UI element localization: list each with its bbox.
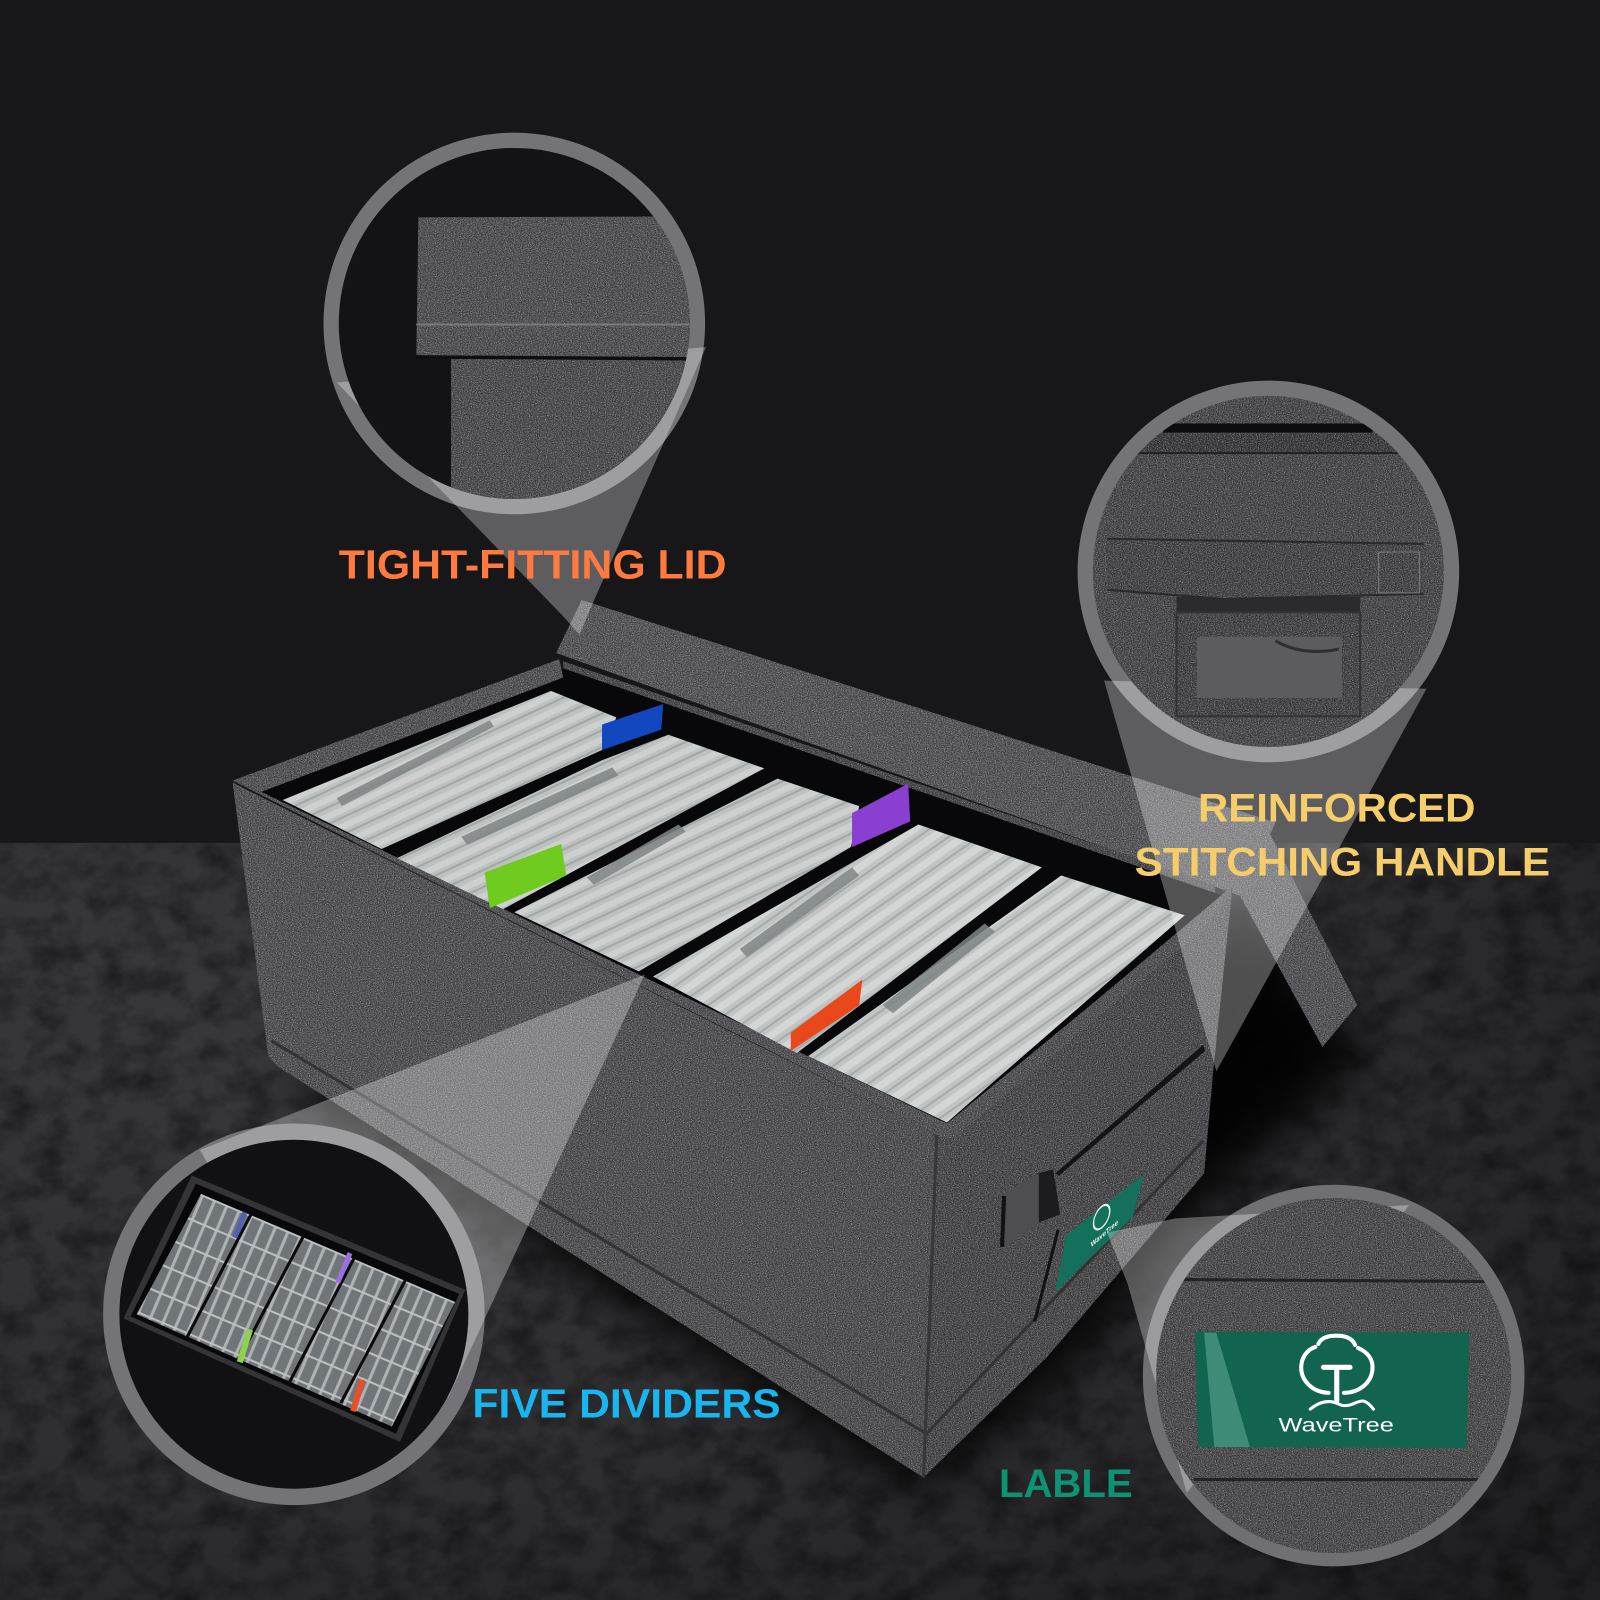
pointer cone xyxy=(1107,1205,1409,1493)
blue divider tab xyxy=(602,704,663,750)
side label logo xyxy=(1089,1194,1118,1249)
top view tabs xyxy=(235,1212,245,1238)
lid detail fabric xyxy=(416,216,690,499)
label pocket xyxy=(1178,613,1360,616)
circle ring xyxy=(1078,381,1459,762)
box shadow on floor xyxy=(286,918,1367,1490)
side handle slot xyxy=(1055,1045,1205,1176)
open lid xyxy=(556,600,1276,898)
compartment 1 xyxy=(283,691,616,849)
callout: tight-fitting lid xyxy=(323,133,714,635)
callout: label xyxy=(1107,1185,1524,1566)
right panel xyxy=(923,886,1233,1478)
handle strap xyxy=(1107,560,1258,598)
green divider tab xyxy=(485,844,566,908)
pointer cone xyxy=(337,347,706,635)
WaveTree logo xyxy=(1301,1336,1373,1409)
circle ring xyxy=(103,1123,485,1505)
side label pocket edge xyxy=(1035,1230,1058,1321)
shadow under strap xyxy=(1176,596,1360,612)
green label xyxy=(1195,1332,1469,1448)
side green label xyxy=(1055,1174,1144,1292)
back left rim xyxy=(233,659,563,792)
left panel xyxy=(233,783,937,1478)
circle inner xyxy=(339,148,690,499)
handle strap end dark xyxy=(1037,1169,1060,1222)
circle inner with fabric xyxy=(1156,1198,1511,1553)
compartment 2 xyxy=(397,735,764,909)
front corner edge xyxy=(923,1135,937,1478)
label: five dividers: FIVE DIVIDERS xyxy=(472,1380,781,1426)
compartment 3 xyxy=(514,779,859,971)
compartment 4 xyxy=(653,824,1042,1053)
circle ring xyxy=(1143,1185,1524,1566)
top seam xyxy=(1163,423,1372,433)
box inner black cavity xyxy=(261,668,1230,1123)
rims of box xyxy=(233,781,1233,1139)
label: tight-fitting lid: TIGHT-FITTING LID xyxy=(339,542,727,588)
callout: five dividers xyxy=(103,974,645,1505)
label: stitching handle: STITCHING HANDLE xyxy=(1135,841,1550,885)
pointer cone xyxy=(1104,681,1427,1071)
background: dark wall xyxy=(0,0,1600,843)
top view of box xyxy=(123,1176,465,1442)
label reflection xyxy=(1204,1333,1250,1447)
circle inner xyxy=(119,1140,468,1489)
orange divider tab xyxy=(791,980,862,1051)
bottom stitched band xyxy=(271,1041,1203,1434)
slots in the compartments xyxy=(337,720,995,1013)
side label logo: WaveTree xyxy=(1091,1217,1118,1249)
WaveTree wordmark: WaveTree xyxy=(1279,1415,1394,1437)
storage box xyxy=(233,600,1357,1478)
label: reinforced: REINFORCED xyxy=(1198,786,1476,830)
pointer cone xyxy=(200,974,645,1398)
divider lines xyxy=(187,1214,405,1403)
lid overhang xyxy=(416,216,690,499)
circle inner with fabric xyxy=(1093,396,1444,747)
background: concrete floor xyxy=(0,843,1600,1600)
purple divider tab xyxy=(852,784,910,847)
handle tab xyxy=(1002,1173,1039,1247)
compartment 5 xyxy=(808,876,1185,1122)
label: lable: LABLE xyxy=(999,1462,1133,1506)
callout: reinforced stitching handle xyxy=(1078,381,1459,1071)
strap stitched end xyxy=(1379,552,1419,593)
circle ring xyxy=(323,133,705,514)
lid flap at right xyxy=(1237,824,1357,1047)
